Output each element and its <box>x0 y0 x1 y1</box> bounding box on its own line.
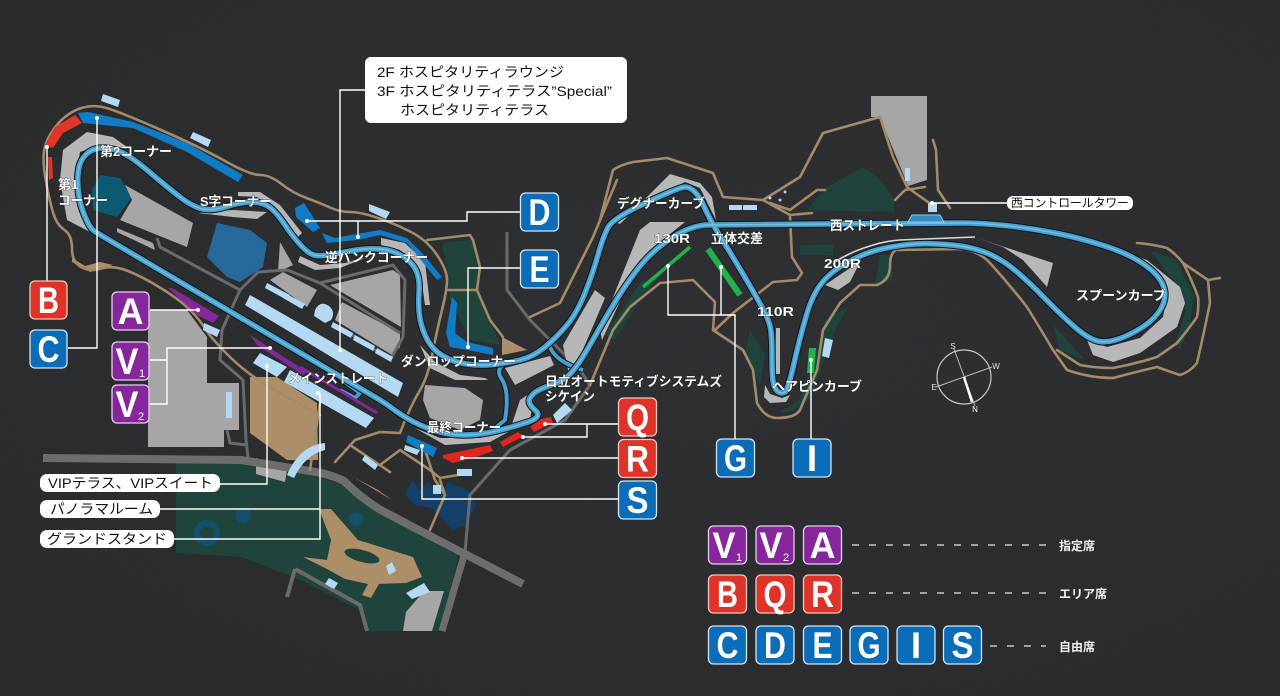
tan paved areas <box>72 258 527 598</box>
legend: reserved seats: 2 <box>783 552 789 564</box>
callout: hospitality: 3F ホスピタリティテラス”Special” <box>377 83 612 99</box>
callout: VIP terrace: VIPテラス、VIPスイート <box>48 475 213 491</box>
leader line end dots <box>45 116 934 460</box>
circuit corner labels: デグナーカーブ <box>617 196 705 211</box>
badge: V1: 1 <box>139 368 145 380</box>
legend: reserved seats: 指定席 <box>1059 538 1095 553</box>
grey service roads <box>157 232 590 631</box>
badge: V1 <box>112 341 149 382</box>
legend: reserved seats: V <box>712 525 736 566</box>
circuit corner labels: メインストレート <box>288 371 388 386</box>
badge: E <box>520 249 558 290</box>
legend: unreserved seats: S <box>952 625 974 666</box>
legend: area seats: エリア席 <box>1059 586 1107 601</box>
seat area: I <box>807 348 816 373</box>
badge: V2: V <box>116 384 139 425</box>
badge: Q: Q <box>626 397 649 438</box>
circuit corner labels: 110R <box>757 304 795 319</box>
parkland green areas <box>176 167 1194 631</box>
compass: W <box>992 362 1000 371</box>
control tower gantry <box>908 215 944 222</box>
badge: V1: V <box>116 341 139 382</box>
circuit corner labels: 200R <box>824 256 862 271</box>
seat area: G <box>643 247 740 295</box>
badge: I <box>793 438 831 479</box>
badge: R: R <box>626 438 649 480</box>
callout: hospitality: 2F ホスピタリティラウンジ <box>377 64 564 80</box>
brown paths <box>44 106 1220 530</box>
badge: C: C <box>38 329 60 370</box>
circuit corner labels: ダンロップコーナー <box>401 354 516 369</box>
circuit corner labels: 立体交差 <box>711 231 763 246</box>
compass: S <box>950 342 956 351</box>
legend: unreserved seats: C <box>716 625 738 666</box>
circuit corner labels: S字コーナー <box>200 194 272 209</box>
compass <box>931 342 1000 414</box>
main public roads <box>43 458 523 631</box>
legend: reserved seats: V <box>760 525 783 566</box>
legend: unreserved seats <box>708 625 1095 666</box>
circuit corner labels <box>58 144 1166 435</box>
white outer kerb line <box>835 237 975 262</box>
badge: S <box>618 480 656 521</box>
legend: area seats: Q <box>764 574 786 615</box>
callout: hospitality: ホスピタリティテラス <box>400 102 549 118</box>
seat area: Q <box>500 417 553 447</box>
circuit corner labels: 日立オートモティブシステムズ <box>545 374 722 389</box>
badge: A: A <box>118 291 144 332</box>
legend: unreserved seats: G <box>858 625 880 666</box>
circuit corner labels: 130R <box>654 231 691 246</box>
badge: V2: 2 <box>138 411 144 423</box>
circuit corner labels: シケイン <box>545 389 595 404</box>
badge: B: B <box>38 280 59 321</box>
buildings <box>101 94 937 599</box>
seat area: V strip <box>300 367 377 413</box>
circuit corner labels: スプーンカーブ <box>1076 288 1166 303</box>
badge: E: E <box>530 249 550 290</box>
seat area: R <box>443 445 493 463</box>
callout: grandstand: グランドスタンド <box>47 531 167 547</box>
badge: D: D <box>528 192 550 233</box>
circuit corner labels: ヘアピンカーブ <box>772 379 862 394</box>
badge: I: I <box>807 438 817 479</box>
seat area: V1 V2 <box>250 335 307 375</box>
badge: V2 <box>112 384 149 425</box>
circuit corner labels: 逆バンクコーナー <box>325 250 428 265</box>
circuit corner labels: 第2コーナー <box>100 144 172 159</box>
legend: area seats: R <box>811 574 834 615</box>
run-off areas <box>60 132 1185 445</box>
circuit track <box>78 148 1165 435</box>
circuit corner labels: コーナー <box>58 193 108 208</box>
callout: panorama room: パノラマルーム <box>50 501 153 517</box>
legend: unreserved seats: D <box>764 625 786 666</box>
legend: reserved seats: 1 <box>736 552 742 564</box>
compass: N <box>972 405 978 414</box>
seat area: S <box>406 435 437 457</box>
panel: circuit map <box>43 94 1220 631</box>
legend: reserved seats: A <box>810 525 836 566</box>
circuit corner labels: 西ストレート <box>830 218 905 233</box>
seat area: E <box>446 297 493 355</box>
legend: unreserved seats: E <box>812 625 832 666</box>
seat area: A <box>168 288 219 323</box>
legend: area seats <box>708 574 1107 615</box>
callout: hospitality <box>365 57 627 123</box>
legend: area seats: B <box>717 574 738 615</box>
badge: G: G <box>724 438 747 479</box>
legend: unreserved seats: I <box>911 625 921 666</box>
leader lines <box>47 90 1007 539</box>
car parks and grey lots <box>117 96 927 631</box>
water features <box>92 175 476 543</box>
circuit corner labels: 最終コーナー <box>427 420 501 435</box>
seat area: B <box>45 115 82 180</box>
seat area: C <box>78 112 243 182</box>
compass: E <box>931 383 937 392</box>
legend: reserved seats <box>708 525 1095 566</box>
badge: S: S <box>626 480 648 521</box>
circuit corner labels: 第1 <box>58 177 78 192</box>
legend: unreserved seats: 自由席 <box>1059 639 1095 654</box>
seat area: D <box>295 203 442 280</box>
callout: west control tower: 西コントロールタワー <box>1011 196 1129 210</box>
